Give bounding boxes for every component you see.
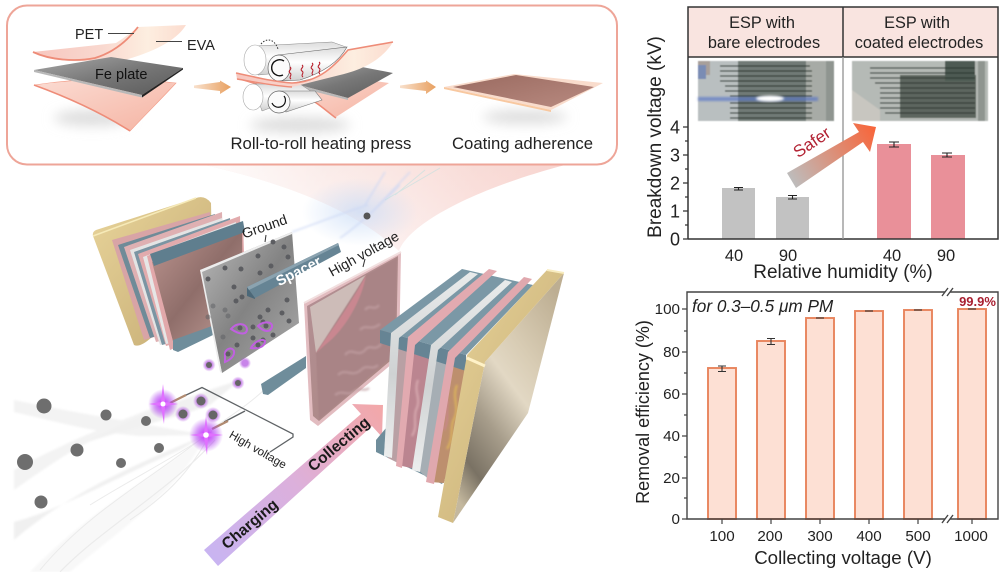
x tick labels: 90 [779,247,797,265]
right electrode stack [376,269,564,523]
coated plate [444,74,603,124]
label: Ground: Ground [240,211,289,241]
arrow: to roll press [194,80,231,94]
annotation: particle size: for 0.3–0.5 μm PM [692,296,834,316]
high-voltage electrode plate [304,252,401,426]
y tick labels: 2 [670,174,680,194]
y tick labels: 20 [663,470,680,487]
arrow: safer [787,123,876,188]
lower spacer fragment [261,356,306,395]
icon: heat waves [289,62,320,79]
discharge wires [170,388,293,452]
silver plate 1 [384,272,478,458]
x tick labels: 500 [905,528,931,545]
label: High voltage, discharge: High voltage [227,429,288,472]
header: coated electrodes: coated electrodes [855,34,983,52]
y tick labels: 4 [670,118,680,138]
annotation: 99.9%: 99.9% [959,294,996,309]
top spacer: front face [380,330,466,371]
particles: uncharged [17,398,164,508]
x tick labels [709,528,988,545]
air flow wisps [14,375,278,572]
x tick labels: 300 [807,528,833,545]
label: PET [75,27,134,43]
stacked coated plates [112,212,246,350]
top spacer: upper face [380,269,533,355]
y tick labels: 60 [663,386,680,403]
gold back plate [93,197,213,346]
bars: coated electrodes [877,144,965,239]
y tick labels: 3 [670,146,680,166]
zoom cone from press panel to high-voltage plate [205,165,565,251]
label: High voltage plate: High voltage [326,228,402,279]
x tick labels: 40 [725,247,743,265]
silver plate 2 [412,280,512,472]
bottom spacer [376,428,452,484]
pink plate 1 [396,269,497,468]
error bars [718,309,976,372]
label: EVA [156,38,215,54]
bottom spacer [173,326,213,352]
y axis title: Breakdown voltage (kV) [645,36,666,238]
y tick labels: 40 [663,428,680,445]
arrow: charging to collecting [204,404,383,566]
x tick labels: 100 [709,528,735,545]
y tick labels: 0 [670,230,680,250]
left electrode stack [93,197,246,352]
x axis title: Collecting voltage (V) [754,547,932,568]
label: Safer: Safer [790,123,834,162]
bars [708,309,986,519]
internal faces [384,345,396,455]
axes frame [687,288,998,523]
particles: charged [175,357,251,423]
plate perforations [206,240,292,348]
y tick labels: 100 [655,301,680,318]
x tick labels: 200 [757,528,783,545]
x tick labels: 40 [883,247,901,265]
label: Spacer: Spacer [274,254,324,290]
caption: roll-to-roll: Roll-to-roll heating press [230,134,411,153]
y tick labels: 0 [672,511,680,528]
corona spark 1 [148,384,178,424]
x tick labels: 400 [856,528,882,545]
top spacer [150,221,245,266]
y tick labels: 80 [663,344,680,361]
y ticks [683,127,688,239]
header: bare electrodes: bare electrodes [708,34,820,52]
plate surface mottling [335,305,381,395]
upper rollers [244,40,347,81]
x tick labels: 1000 [954,528,988,545]
film stack with Fe plate [33,25,215,131]
ground electrode plate [200,232,299,373]
photo: coated ESP [852,61,988,121]
label: PET: PET [75,27,103,43]
y tick labels: 1 [670,202,680,222]
roll-to-roll press illustration [236,40,393,133]
label: Charging: Charging [219,496,282,553]
label: EVA: EVA [187,38,215,54]
gold end plate [438,270,564,523]
axes frame [688,7,998,239]
header: coated electrodes: ESP with [884,14,950,32]
x axis title: Relative humidity (%) [753,262,933,283]
y ticks [682,309,687,519]
header: bare electrodes [688,7,843,57]
collected particles with purple trails [225,322,272,362]
bars: bare electrodes [722,188,809,239]
y tick labels [655,301,680,528]
x ticks [722,519,972,524]
photo: breakdown in bare ESP [698,61,834,121]
label: Fe plate: Fe plate [95,67,147,83]
arrow: to coated plate [400,80,436,94]
panel: coating process [7,6,617,164]
pink plate 2 [426,277,532,484]
internal mottling [412,380,457,449]
caption: coating adherence: Coating adherence [452,134,593,153]
x tick labels [725,247,955,265]
error bars [734,142,952,199]
spacer bar [247,243,341,299]
label: Collecting: Collecting [305,414,373,475]
corona spark 2 [189,416,223,455]
y tick labels [670,118,680,250]
header: coated electrodes [843,7,998,57]
lower rollers [243,84,322,113]
y axis title: Removal efficiency (%) [633,320,653,504]
chart: breakdown voltage [645,7,998,283]
header: bare electrodes: ESP with [729,14,795,32]
x tick labels: 90 [937,247,955,265]
chart: removal efficiency [633,288,998,568]
